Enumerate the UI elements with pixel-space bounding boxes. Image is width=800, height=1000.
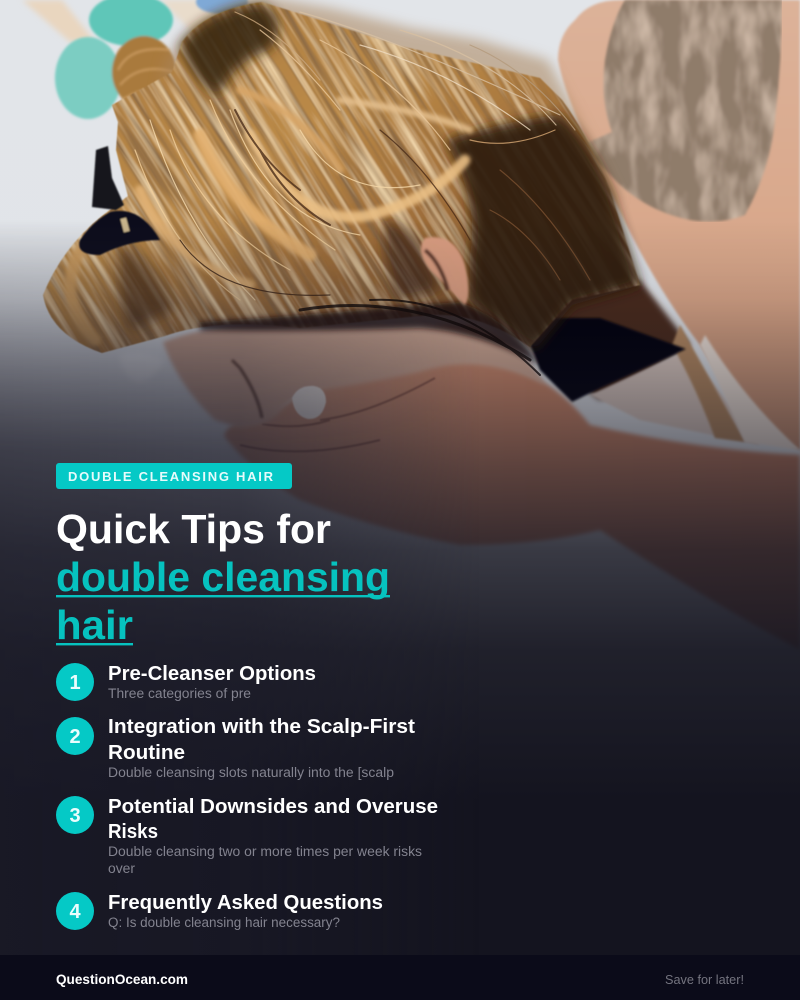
tip 2: Integration with the Scalp-First Routine: Integration with the Scalp-First — [108, 716, 415, 738]
title: hair — [56, 602, 133, 648]
individual hair strands — [135, 12, 590, 375]
ear — [421, 237, 468, 305]
tip 1: Pre-Cleanser Options: 1 — [69, 672, 81, 694]
icon: black hair claw clip — [79, 146, 160, 255]
water splash — [120, 353, 165, 382]
hair mass — [0, 0, 798, 621]
tip 1: Pre-Cleanser Options: Three categories of pre — [108, 686, 251, 701]
tip 3: Potential Downsides and Overuse Risks: 3 — [69, 805, 81, 827]
tip 3: Potential Downsides and Overuse Risks: Double cleansing two or more times per week risks — [108, 844, 422, 859]
tip 2: Integration with the Scalp-First Routine: Routine — [108, 742, 185, 764]
tip 4: Frequently Asked Questions: Frequently Asked Questions — [108, 892, 383, 914]
forehead — [163, 324, 545, 428]
tip 3: Potential Downsides and Overuse Risks — [56, 796, 438, 876]
dark gradient overlay — [0, 229, 800, 955]
icon: teal scrunchies and blue tie — [55, 0, 248, 119]
badge: topic label — [56, 463, 292, 489]
neck, straps and black top — [520, 260, 800, 450]
footer bar — [0, 955, 800, 1000]
icon: white fingernail — [292, 386, 326, 419]
tip 4: Frequently Asked Questions: Q: Is double cleansing hair necessary? — [108, 915, 340, 930]
dark roots and underlayers — [119, 4, 640, 365]
tip 4: Frequently Asked Questions: 4 — [69, 901, 81, 923]
tip 2: Integration with the Scalp-First Routine: 2 — [69, 726, 81, 748]
tip 4: Frequently Asked Questions — [56, 892, 383, 930]
footer bar: QuestionOcean.com — [56, 971, 188, 987]
shoulder with tattoo — [558, 0, 800, 450]
tip 2: Integration with the Scalp-First Routine — [56, 716, 415, 780]
golden highlights — [70, 90, 470, 340]
title — [56, 506, 390, 648]
tip 3: Potential Downsides and Overuse Risks: over — [108, 861, 136, 876]
tip 1: Pre-Cleanser Options — [56, 663, 316, 701]
tip 3: Potential Downsides and Overuse Risks: Risks — [108, 821, 158, 843]
tip 3: Potential Downsides and Overuse Risks: Potential Downsides and Overuse — [108, 796, 438, 818]
badge: topic label: DOUBLE CLEANSING HAIR — [68, 469, 274, 484]
forearm and hand — [224, 358, 800, 650]
title: double cleansing — [56, 554, 390, 600]
tip 1: Pre-Cleanser Options: Pre-Cleanser Options — [108, 663, 316, 685]
tip 2: Integration with the Scalp-First Routine: Double cleansing slots naturally into the [scalp — [108, 765, 394, 780]
footer bar: Save for later! — [665, 972, 744, 987]
soft flyaway fringe — [150, 0, 620, 220]
title: Quick Tips for — [56, 506, 331, 552]
